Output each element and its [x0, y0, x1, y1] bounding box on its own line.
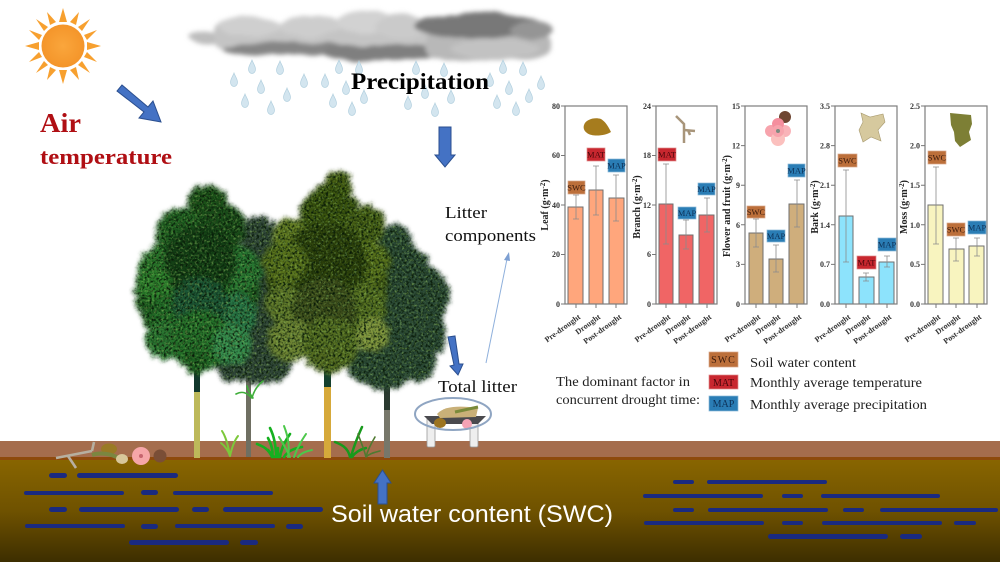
icon: leaf [584, 118, 611, 136]
chart: moss [898, 102, 987, 346]
chart: flower and fruit: Flower and fruit (g·m [722, 164, 733, 257]
bars [928, 205, 984, 304]
legend: SWC: Soil water content [750, 356, 856, 371]
label: litter components: components [445, 226, 536, 245]
chart: flower and fruit: Drought [754, 312, 782, 337]
label: air temperature: Air [40, 108, 81, 138]
chart: bark: 0.7 [820, 260, 830, 269]
factor tags: MAP [878, 240, 896, 250]
factor tags: MAP [678, 208, 696, 218]
chart: flower and fruit: 3 [736, 260, 740, 269]
chart: leaf: Drought [574, 312, 602, 337]
chart: branch: 0 [647, 300, 651, 309]
chart: branch: 6 [647, 250, 651, 259]
factor tags: MAP [767, 231, 785, 241]
chart: moss: Drought [934, 312, 962, 337]
factor tags [658, 148, 716, 219]
icon: flower and fruit [765, 111, 791, 146]
chart: leaf: Leaf (g·m [540, 189, 551, 231]
bars [659, 204, 714, 304]
chart: bark: Drought [844, 312, 872, 337]
arrow: air temperature down [117, 85, 161, 122]
chart: branch: 24 [643, 102, 651, 111]
chart: flower and fruit: 6 [736, 221, 740, 230]
label: soil water content: Soil water content (SWC) [331, 501, 613, 528]
legend: MAP: MAP [713, 399, 735, 410]
legend caption [556, 375, 700, 408]
bars [568, 190, 624, 304]
chart: leaf: Pre-drought [543, 312, 582, 344]
factor tags: SWC [928, 152, 947, 162]
chart: branch: Pre-drought [633, 312, 672, 344]
chart: flower and fruit [721, 102, 807, 346]
chart: moss: 1.5 [910, 181, 920, 190]
chart: bark: ) [810, 180, 821, 184]
factor tags: MAP [607, 160, 626, 170]
chart: flower and fruit: 9 [736, 181, 740, 190]
chart: moss: Moss (g·m [899, 189, 910, 234]
tree: front centre, olive [263, 171, 390, 458]
chart: flower and fruit: Pre-drought [723, 312, 762, 344]
icon: litter trap [415, 398, 491, 447]
chart: moss: -2 [898, 183, 906, 189]
chart: bark: 1.4 [820, 221, 830, 230]
legend caption: concurrent drought time: [556, 393, 700, 408]
tree: front left, green [135, 185, 262, 458]
chart: bark: Post-drought [852, 312, 893, 346]
arrow: total litter to components [486, 252, 510, 363]
factor tags [928, 151, 986, 236]
chart: bark: Bark (g·m [810, 190, 821, 234]
legend: MAP [709, 396, 927, 413]
chart: bark: Pre-drought [813, 312, 852, 344]
label: litter components [445, 203, 536, 245]
chart: flower and fruit: 0 [736, 300, 740, 309]
legend caption: The dominant factor in [556, 375, 690, 390]
legend: MAT: Monthly average temperature [750, 376, 922, 391]
chart: moss: Pre-drought [903, 312, 942, 344]
chart: bark: -2 [809, 183, 817, 190]
label: litter components: Litter [445, 203, 487, 222]
heading: precipitation: Precipitation [351, 69, 489, 94]
factor tags: MAT [587, 150, 606, 160]
legend [556, 352, 927, 413]
chart: leaf: 60 [552, 151, 560, 160]
chart: flower and fruit: -2 [721, 158, 729, 164]
chart: branch: 12 [643, 201, 651, 210]
factor tags: MAP [968, 222, 986, 232]
ground band [0, 441, 1000, 460]
chart: leaf: Post-drought [582, 312, 623, 346]
factor tags: SWC [567, 182, 586, 192]
chart: branch: Drought [664, 312, 692, 337]
chart: branch: -2 [631, 178, 639, 185]
factor tags: SWC [747, 207, 766, 217]
chart: leaf: ) [540, 179, 551, 183]
chart: branch [631, 102, 717, 346]
bars [749, 204, 804, 304]
chart: moss: 2.5 [910, 102, 920, 111]
chart: moss: 0.5 [910, 260, 920, 269]
cloud [188, 10, 554, 61]
factor tags: MAP [787, 166, 806, 176]
icon: branch [676, 116, 695, 143]
arrow: soil water up [374, 470, 391, 504]
chart: branch: 18 [643, 151, 651, 160]
chart: moss: 2.0 [910, 142, 920, 150]
chart: branch: ) [632, 175, 643, 179]
chart: flower and fruit: ) [722, 155, 733, 158]
label: air temperature [40, 108, 172, 169]
litter pile on ground [56, 442, 166, 468]
chart: moss: 0.0 [910, 300, 920, 309]
legend: SWC [709, 352, 856, 371]
factor tags: SWC [947, 224, 966, 234]
icon: bark [859, 113, 885, 142]
chart: bark: 3.5 [820, 102, 830, 111]
chart: bark [809, 102, 897, 346]
legend: SWC: SWC [711, 355, 736, 366]
factor tags: MAP [697, 184, 716, 194]
chart: leaf: 0 [556, 300, 560, 309]
chart: flower and fruit: 12 [732, 142, 740, 150]
chart: leaf: 20 [552, 250, 560, 259]
chart: leaf: 80 [552, 102, 560, 111]
soil [0, 460, 1000, 562]
chart: bark: 2.8 [820, 142, 830, 150]
arrow: canopy to total litter [448, 336, 463, 375]
factor tags: SWC [838, 156, 857, 166]
soil water right [643, 480, 998, 539]
chart: moss: Post-drought [942, 312, 983, 346]
rain drops [230, 60, 544, 116]
chart: flower and fruit: 15 [732, 102, 740, 111]
legend: MAP: Monthly average precipitation [750, 398, 927, 413]
chart: moss: ) [899, 180, 910, 183]
chart: leaf: 40 [552, 201, 560, 210]
icon: moss [950, 113, 972, 147]
legend: MAT: MAT [713, 378, 734, 389]
chart: bark: 2.1 [820, 181, 830, 190]
chart: moss: 1.0 [910, 221, 920, 230]
chart: leaf [539, 102, 627, 346]
bars [839, 216, 894, 304]
label: air temperature: temperature [40, 144, 172, 169]
chart: branch: Branch (g·m [632, 185, 643, 239]
icon: sun [25, 8, 101, 84]
tree: back left, dark [215, 216, 294, 457]
factor tags [567, 148, 626, 194]
soil water left [24, 473, 323, 545]
factor tags: MAT [658, 150, 677, 160]
chart: flower and fruit: Post-drought [762, 312, 803, 346]
factor tags [747, 164, 806, 242]
arrow: precipitation down [435, 127, 455, 167]
factor tags: MAT [858, 258, 876, 268]
chart: bark: 0.0 [820, 300, 830, 309]
grass tufts [221, 381, 380, 457]
chart: leaf: -2 [539, 182, 547, 189]
factor tags [838, 154, 896, 269]
chart: branch: Post-drought [672, 312, 713, 346]
label: total litter: Total litter [438, 377, 517, 396]
tree: back right, dark [347, 225, 450, 458]
